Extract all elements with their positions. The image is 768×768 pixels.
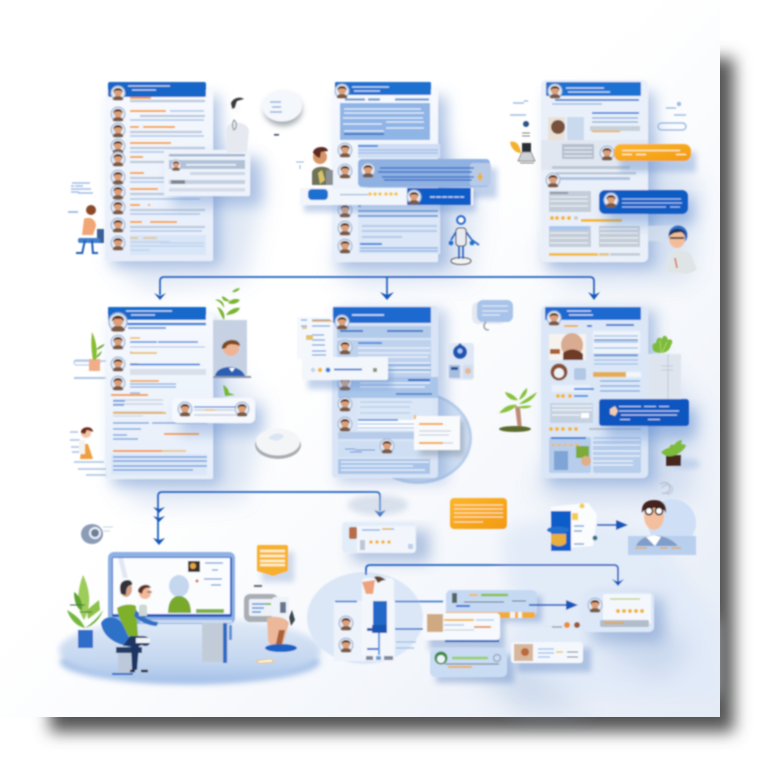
- linking line with small icons: [510, 622, 600, 628]
- palm plant: [499, 388, 537, 432]
- white dish: [255, 428, 301, 459]
- rating strip: [300, 188, 476, 212]
- process card top: [445, 590, 542, 622]
- pedestal with green plant: [648, 336, 681, 400]
- blue comment bubble, panel 6: [599, 399, 696, 438]
- panel 2 header: [335, 82, 431, 95]
- panel 5: document on blue blob: [332, 306, 472, 484]
- side notes, right of panel 3: [658, 102, 686, 130]
- process card middle: [423, 613, 505, 650]
- floating comment card 1: [164, 150, 262, 206]
- blue comment bubble: [599, 190, 694, 224]
- icon: gear camera: [81, 524, 113, 544]
- panel 3 header: [546, 82, 641, 96]
- person and notes, lower left of panel 4: [70, 427, 106, 475]
- person with green jacket: [296, 147, 333, 185]
- panel 6 image tiles: [549, 333, 586, 380]
- panel 5 text rows: [337, 326, 438, 474]
- panel 2 avatars: [338, 142, 352, 254]
- two people at the desk: [101, 580, 232, 674]
- connector: middle row to bottom row: [153, 492, 386, 545]
- side list: [297, 317, 333, 359]
- robot with orange leaf, left of panel 3: [510, 101, 535, 163]
- panel 3 media tiles: [548, 113, 640, 140]
- panel 2: document with overlays: [330, 82, 480, 288]
- robot figure: [449, 216, 479, 264]
- panel 5 avatars: [334, 314, 352, 432]
- floating reviewer card: [172, 398, 262, 434]
- panel 3 text columns: [549, 191, 640, 247]
- plant on pedestal: [215, 288, 240, 320]
- person two: [139, 604, 147, 616]
- potted plant: [661, 440, 700, 469]
- chair: [101, 617, 131, 647]
- panel 3 star rating: [550, 216, 622, 222]
- panel 6 rating row: [549, 427, 641, 431]
- panel 3 footer bar: [549, 253, 640, 256]
- pedestal with plant and person: [213, 288, 251, 378]
- panel 1 header: [108, 82, 206, 97]
- expert with glasses: [628, 485, 696, 555]
- connector: reviewer to final card: [366, 565, 624, 586]
- speech bubble with lines: [472, 300, 513, 330]
- panel 5 header: [333, 307, 431, 323]
- small review card: [342, 495, 430, 562]
- process card right: [511, 642, 591, 672]
- final card with rating: [584, 592, 664, 642]
- panel 3 middle band: [541, 140, 648, 188]
- bottom-right soft backdrop: [307, 518, 717, 710]
- lower-left scene base: [59, 618, 321, 684]
- panel 2 tab strip: [345, 98, 429, 101]
- speech bubble top: [262, 90, 302, 136]
- panel 4 avatars: [108, 312, 128, 390]
- process card bottom: [430, 648, 514, 683]
- panel 4 rows: [111, 324, 207, 475]
- panel 6 text column: [593, 331, 641, 391]
- plant beside monitor: [67, 575, 103, 648]
- panel 6: rich document: [535, 306, 700, 506]
- panel 3: document with bubbles: [540, 80, 700, 286]
- reviewer figure panel: [334, 576, 443, 661]
- panel 6 lower tiles: [549, 437, 641, 473]
- drop shadow of the sheet: [50, 58, 734, 732]
- blue icon tile: [447, 343, 474, 380]
- panel 2 rows: [358, 144, 440, 254]
- arrow to the expert: [597, 520, 628, 530]
- panel 4: document with side figures: [105, 307, 265, 506]
- panel 4 header: [108, 307, 206, 320]
- small grey glyph: [660, 483, 670, 493]
- floating toolbar card: [302, 357, 392, 389]
- panel 6 star block: [550, 385, 594, 423]
- robot with screen: [244, 586, 297, 663]
- orange note document: [414, 416, 464, 456]
- orange text card: [450, 498, 507, 529]
- panel 1: list of reviewers: [105, 82, 265, 290]
- panel 1 rows: [130, 98, 206, 255]
- panel 2 text block: [340, 103, 430, 140]
- doctor with glasses: [648, 226, 697, 274]
- panel 1 avatars: [110, 86, 126, 250]
- desk: [140, 620, 232, 663]
- small green sprout: [223, 385, 235, 396]
- blue floating strip: [358, 159, 497, 198]
- arrow to final card: [529, 600, 578, 610]
- connector: top row to middle row: [154, 277, 600, 300]
- person one: [117, 605, 138, 636]
- arrowheads: [154, 292, 600, 300]
- double arrowheads: [153, 507, 386, 545]
- clipboard illustration: [547, 503, 598, 551]
- person figure beside card 1: [226, 98, 249, 153]
- monitor with video call: [108, 552, 235, 624]
- orange comment bubble: [614, 144, 696, 172]
- seated person, left of panel 1: [68, 183, 104, 254]
- plant in orange pot: [74, 332, 106, 378]
- panel 5 small figure: [380, 438, 394, 454]
- orange note: [257, 545, 294, 582]
- panel 6 header: [545, 307, 641, 320]
